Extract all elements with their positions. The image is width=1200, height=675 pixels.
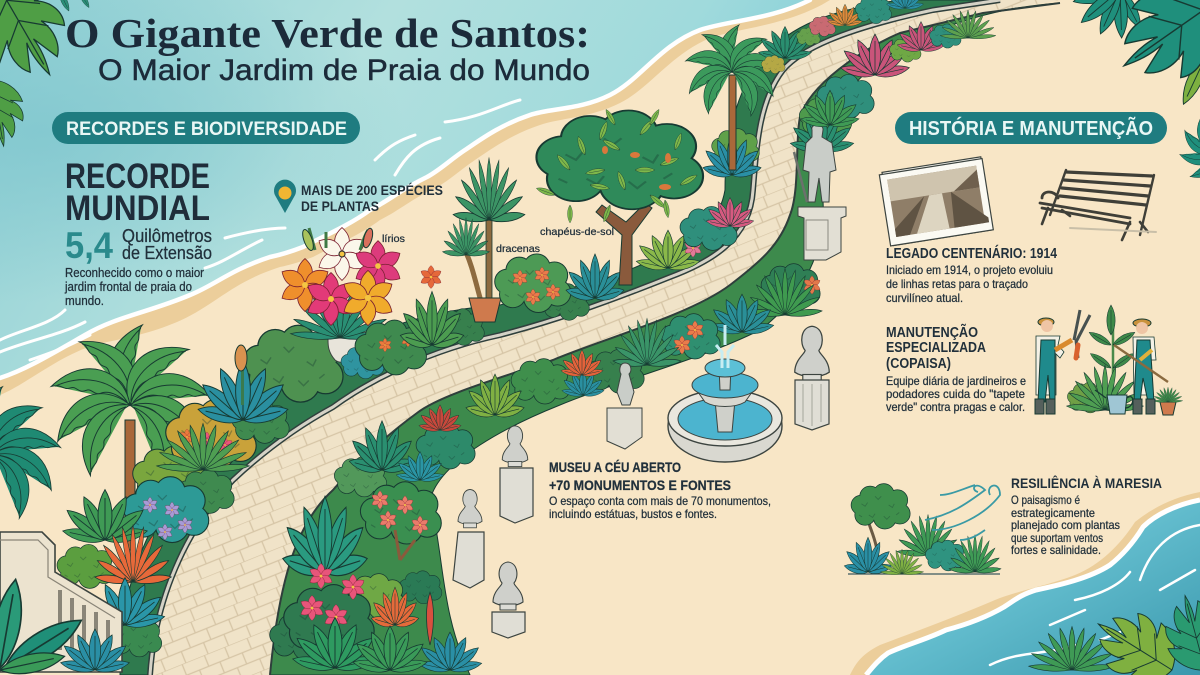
legacy heading: LEGADO CENTENÁRIO: 1914 <box>886 245 1057 262</box>
fountain <box>668 325 782 462</box>
bust on low plinth <box>492 562 525 638</box>
maintenance text: verde" contra pragas e calor. <box>886 400 1025 414</box>
icon: park bench <box>1040 170 1156 240</box>
panel: history and maintenance <box>844 112 1183 576</box>
resilience text: que suportam ventos <box>1011 531 1103 545</box>
title line 1: O Gigante Verde de Santos: <box>65 10 590 56</box>
upper-right garden plants <box>758 0 996 129</box>
icon: gardeners <box>1035 305 1183 415</box>
gardener left <box>1035 310 1090 414</box>
balustrade <box>0 532 122 672</box>
sea: bottom-right ocean with shoreline <box>850 492 1200 675</box>
section pill: recordes <box>52 112 360 144</box>
legacy text: de linhas retas para o traçado <box>886 277 1028 291</box>
dracena palm and potted dracena <box>442 158 625 322</box>
icon: wind-swept plants <box>844 484 1001 576</box>
lily bouquet <box>278 227 403 378</box>
section heading: história: HISTÓRIA E MANUTENÇÃO <box>909 116 1153 140</box>
maintenance text: Equipe diária de jardineiros e <box>886 374 1026 388</box>
teal foliage below bird of paradise <box>84 578 166 630</box>
shrubs under the palm <box>57 326 342 656</box>
title line 2: O Maior Jardim de Praia do Mundo <box>98 54 590 87</box>
gardener right <box>1114 319 1168 414</box>
museum description: incluindo estátuas, bustos e fontes. <box>549 507 717 521</box>
record description: jardim frontal de praia do <box>64 280 192 294</box>
museum heading: MUSEU A CÉU ABERTO <box>549 459 681 475</box>
tall palm at the bend <box>682 22 781 170</box>
museum heading: +70 MONUMENTOS E FONTES <box>549 477 731 493</box>
sea: top-left ocean with shoreline <box>0 0 830 395</box>
species callout: DE PLANTAS <box>301 198 379 214</box>
maintenance text: podadores cuida do "tapete <box>886 387 1025 401</box>
left palm frond cluster <box>0 383 63 519</box>
foreground leaves top-left <box>0 0 91 151</box>
panel: records and biodiversity <box>52 112 443 308</box>
orange bird flower and agave <box>356 266 484 374</box>
garden bed: upper strip <box>120 0 1000 675</box>
record headline: MUNDIAL <box>65 189 210 228</box>
statue: small figure on pedestal <box>607 363 642 449</box>
lower strip plants <box>270 264 822 675</box>
legacy text: Iniciado em 1914, o projeto evoluiu <box>886 263 1053 277</box>
resilience text: estrategicamente <box>1011 506 1095 520</box>
maintenance heading: MANUTENÇÃO <box>886 323 978 341</box>
record description: Reconhecido como o maior <box>65 266 204 280</box>
bust on tall column <box>795 326 829 430</box>
legacy text: curvilíneo atual. <box>886 291 963 305</box>
label: dracenas: dracenas <box>496 243 540 255</box>
stone promenade path <box>150 0 1060 675</box>
maintenance heading: ESPECIALIZADA <box>886 340 986 356</box>
label: lírios: lírios <box>382 233 405 245</box>
section pill: história <box>895 112 1167 144</box>
big palm tree <box>45 320 214 550</box>
label: chapéus-de-sol: chapéus-de-sol <box>540 226 614 238</box>
pin icon: species <box>274 180 296 213</box>
resilience text: planejado com plantas <box>1011 518 1120 532</box>
foreground leaves top-right <box>1053 0 1200 190</box>
stat label: Quilômetros <box>122 226 212 246</box>
museum description: O espaço conta com mais de 70 monumentos, <box>549 494 771 508</box>
resilience text: fortes e salinidade. <box>1011 543 1101 557</box>
bust on pedestal: museum <box>500 426 533 523</box>
right-side upper shrubs <box>635 129 762 272</box>
chapéu-de-sol tree <box>535 108 702 285</box>
bird of paradise <box>94 525 172 586</box>
resilience heading: RESILIÊNCIA À MARESIA <box>1011 474 1162 491</box>
plant labels <box>382 226 614 255</box>
species callout: MAIS DE 200 ESPÉCIES <box>301 182 443 198</box>
title block <box>65 10 590 87</box>
bust on column: lower <box>453 489 484 588</box>
stat number: 5,4 <box>65 225 113 266</box>
icon: vintage photograph <box>879 157 993 246</box>
section heading: recordes: RECORDES E BIODIVERSIDADE <box>66 119 347 140</box>
panel: museum <box>549 459 771 521</box>
maintenance heading: (COPAISA) <box>886 356 951 372</box>
record description: mundo. <box>65 294 104 308</box>
foreground leaves bottom-left <box>0 577 130 675</box>
foreground leaves bottom-right <box>1029 588 1200 675</box>
stat label: de Extensão <box>122 243 212 263</box>
garden bed: lower strip <box>270 3 1060 675</box>
record headline: RECORDE <box>65 157 210 196</box>
statue on pedestal <box>789 97 855 260</box>
resilience text: O paisagismo é <box>1011 493 1080 507</box>
